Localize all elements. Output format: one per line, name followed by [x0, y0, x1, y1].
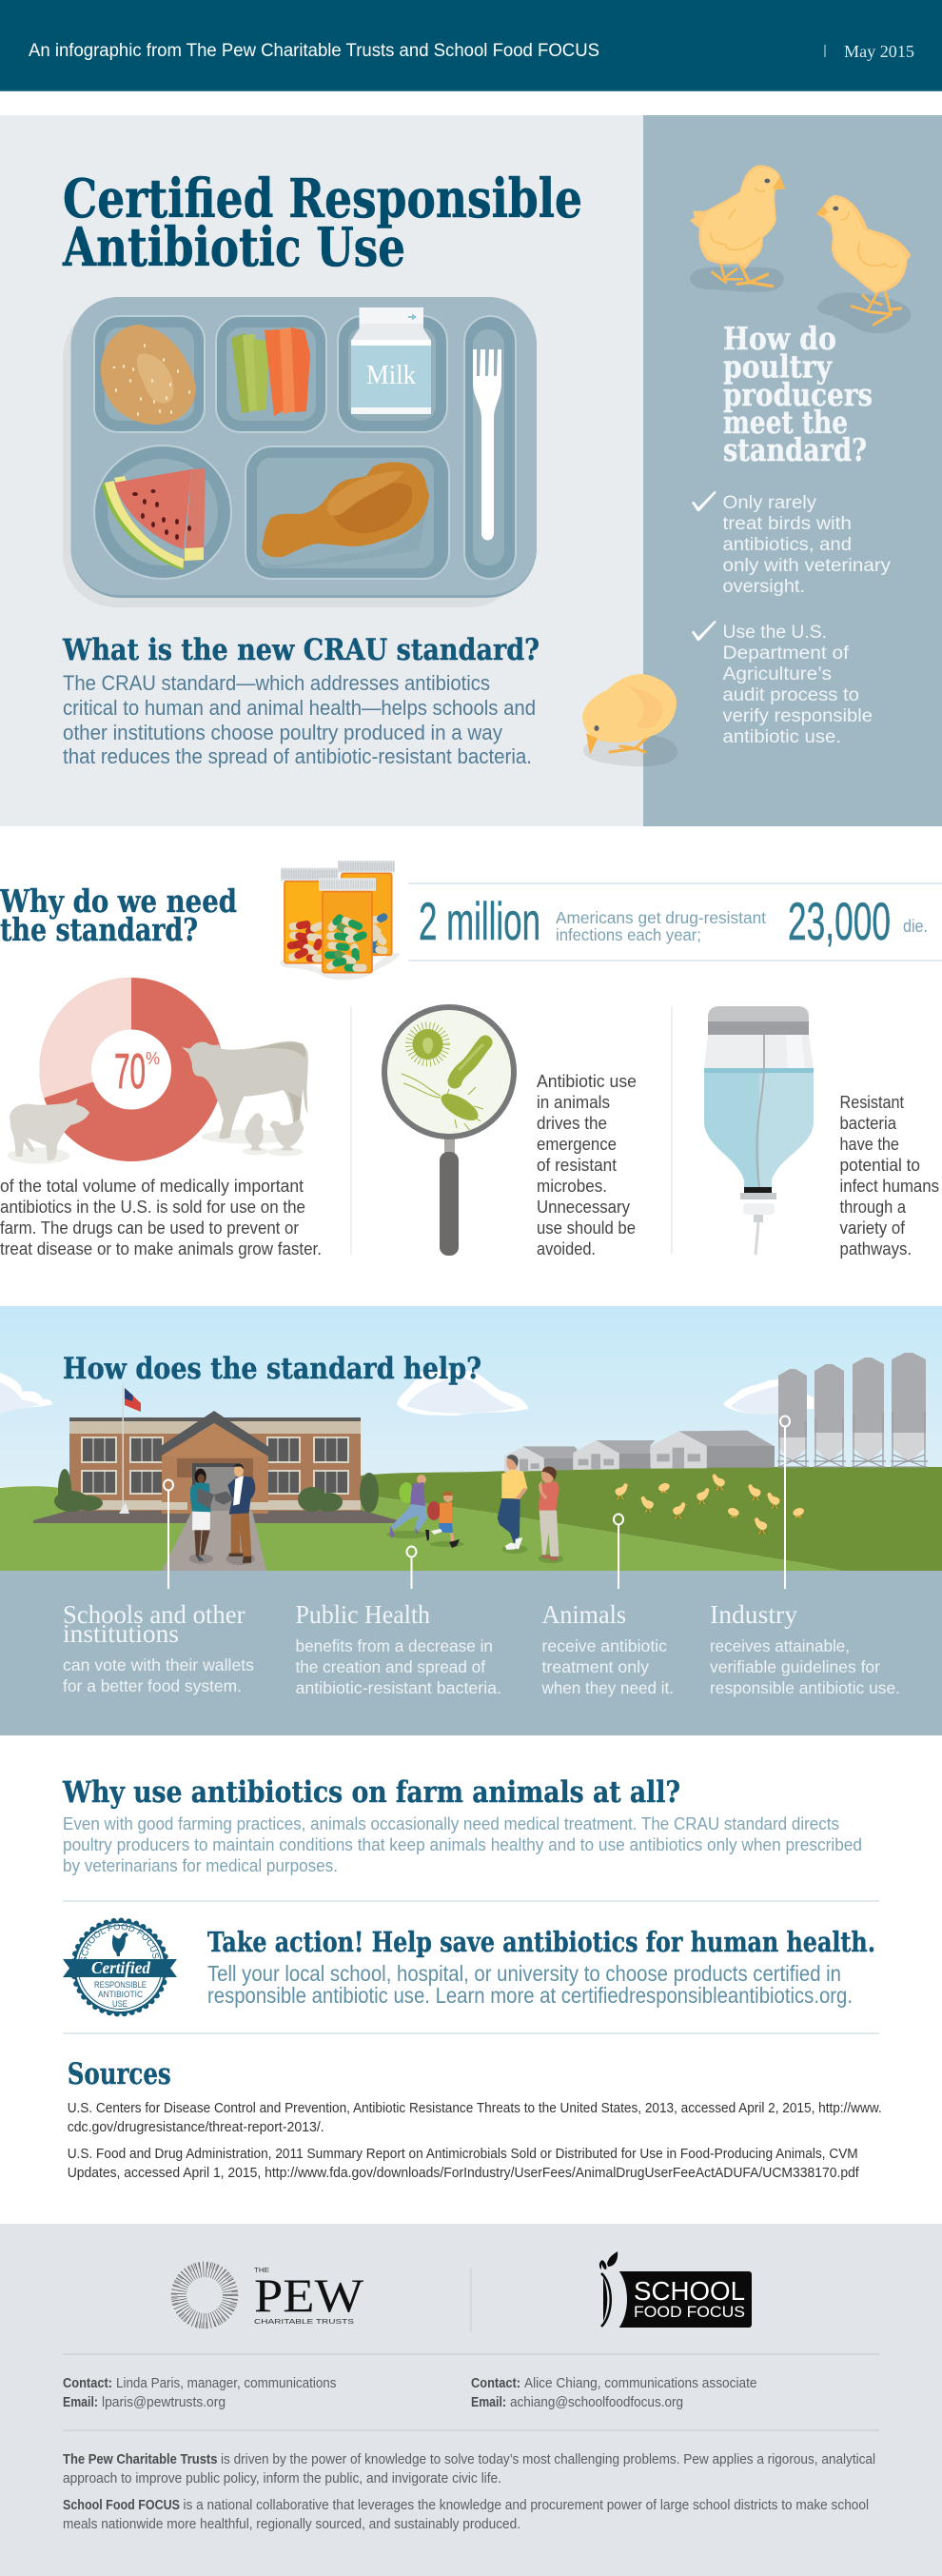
text: call to action: Tell your local school, hospital, or university to choose products certified in [207, 1961, 841, 1986]
food: celery and carrots [231, 327, 310, 416]
illustration: lunch tray [63, 297, 537, 607]
text: about Pew: is driven by the power of knowledge to solve today’s most challenging problems. Pew applies a rigorous, analytical [221, 2452, 875, 2467]
icon: IV bottle [704, 1006, 814, 1255]
food: bun [101, 325, 196, 425]
panel: footer [0, 2224, 942, 2576]
school building [33, 1411, 398, 1523]
title [62, 168, 582, 279]
column: animals: Animals [542, 1600, 626, 1629]
text: antibiotic use in animals: emergence [537, 1134, 617, 1154]
heading: why do we need the standard: the standard? [0, 911, 198, 948]
text: 70 percent explanation: antibiotics in the U.S. is sold for use on the [0, 1197, 305, 1217]
text: Pew contact: Linda Paris, manager, communications [116, 2376, 337, 2391]
column: public health: benefits from a decrease in [295, 1636, 493, 1655]
badge: certified seal [63, 1917, 177, 2016]
icon: check mark two [692, 621, 716, 641]
text: CRAU standard description: that reduces the spread of antibiotic-resistant bacteria. [63, 744, 532, 768]
text: about School Food FOCUS: School Food FOCUS [63, 2498, 180, 2513]
text: about School Food FOCUS [63, 2498, 869, 2532]
badge: certified seal: SCHOOL FOOD FOCUS [80, 1923, 159, 1959]
heading: how do poultry producers meet the standard: How do [723, 320, 836, 357]
text: antibiotic use in animals: Unnecessary [537, 1197, 631, 1217]
text: explanation: by veterinarians for medical purposes. [63, 1856, 338, 1875]
ground: hills [0, 1467, 942, 1571]
column: industry: verifiable guidelines for [710, 1657, 880, 1676]
text: explanation [63, 1814, 862, 1875]
text: resistant bacteria: pathways. [839, 1238, 912, 1258]
heading: why use antibiotics: Why use antibiotics on farm animals at all? [62, 1775, 680, 1810]
illustration: pecking chick [582, 674, 677, 766]
heading: how do poultry producers meet the standard: poultry [723, 348, 833, 385]
column: schools and other institutions: Schools and other [63, 1600, 245, 1629]
text: call to action [207, 1961, 853, 2008]
pin: industry [780, 1417, 790, 1589]
heading: how does the standard help: How does the standard help? [63, 1352, 481, 1386]
heading: how do poultry producers meet the standard: standard? [723, 431, 867, 468]
heading: how do poultry producers meet the standard [723, 320, 873, 468]
column: public health: antibiotic-resistant bacteria. [295, 1678, 501, 1697]
text: use the USDA audit process: Department of [723, 644, 850, 664]
pin: public health [407, 1546, 417, 1589]
logo: Pew: PEW [254, 2269, 364, 2322]
chart: 70 percent donut: % [146, 1049, 160, 1068]
text: source citations: Updates, accessed April 1, 2015, http://www.fda.gov/downloads/ForIndustry/UserFees/AnimalDrugUserFeeActADUFA/UCM338170.pdf [68, 2166, 860, 2181]
heading: how do poultry producers meet the standard: producers [723, 376, 873, 413]
chart: 70 percent donut [39, 978, 224, 1161]
people: adults at school [189, 1464, 255, 1565]
compartments [94, 316, 516, 579]
text: source citations: cdc.gov/drugresistance/threat-report-2013/. [68, 2120, 324, 2135]
text: CRAU standard description [63, 671, 536, 768]
illustration: farm animals [8, 1041, 308, 1164]
front bottle [323, 892, 372, 973]
panel: why use antibiotics on farm animals [62, 1775, 882, 2181]
text: School Food Focus contact: Alice Chiang, communications associate [524, 2376, 757, 2391]
text: antibiotic use in animals [537, 1071, 637, 1258]
barns [504, 1431, 775, 1472]
column: schools and other institutions: can vote with their wallets [63, 1655, 254, 1674]
text: 70 percent explanation: of the total volume of medically important [0, 1176, 304, 1196]
people: children running [386, 1475, 464, 1548]
food: milk carton [351, 307, 431, 414]
chicks in field [615, 1475, 805, 1534]
text: Pew contact [63, 2376, 337, 2410]
icon: check mark one [692, 491, 716, 511]
logo: School Food Focus: FOOD FOCUS [634, 2303, 745, 2321]
text: about School Food FOCUS: is a national collaborative that leverages the knowledge and procurement power of large school districts to make school [183, 2498, 869, 2513]
text: antibiotic use in animals: microbes. [537, 1176, 607, 1196]
column: schools and other institutions: for a better food system. [63, 1676, 242, 1695]
text: Americans get drug-resistant infections: Americans get drug-resistant [556, 908, 766, 927]
text: School Food Focus contact [471, 2376, 757, 2410]
text: CRAU standard description: critical to human and animal health—helps schools and [63, 696, 536, 720]
text: resistant bacteria: Resistant [839, 1092, 904, 1112]
text: 70 percent explanation: treat disease or to make animals grow faster. [0, 1238, 322, 1258]
text: 70 percent explanation [0, 1176, 322, 1258]
title: Certified Responsible [63, 168, 582, 230]
text: Americans get drug-resistant infections [556, 908, 766, 944]
column: industry: responsible antibiotic use. [710, 1678, 900, 1697]
header band: May 2015 [844, 42, 914, 61]
chart: 70 percent donut: 70 [114, 1044, 146, 1100]
text: antibiotic use in animals: drives the [537, 1113, 607, 1133]
text: antibiotic use in animals: in animals [537, 1092, 610, 1112]
logo: Pew: THE [254, 2268, 269, 2274]
text: antibiotic use in animals: use should be [537, 1218, 636, 1238]
back bottle [342, 873, 392, 955]
stat: 2 million: 2 million [419, 891, 540, 951]
column: schools and other institutions: institutions [63, 1619, 179, 1648]
text: resistant bacteria: bacteria [839, 1113, 897, 1133]
walkway [162, 1511, 266, 1571]
column: animals: when they need it. [541, 1678, 674, 1697]
badge: certified seal: USE [112, 1999, 128, 2010]
text: about Pew: approach to improve public policy, inform the public, and invigorate civic life. [63, 2471, 501, 2487]
panel: how does the standard help scene [0, 1306, 942, 1571]
heading: why do we need the standard: Why do we need [0, 882, 237, 920]
text: antibiotic use in animals: avoided. [537, 1238, 596, 1258]
logo: Pew: CHARITABLE TRUSTS [254, 2317, 354, 2326]
column: industry: Industry [710, 1600, 798, 1629]
pin: animals [614, 1514, 623, 1589]
pin: schools [164, 1479, 173, 1589]
logo: School Food Focus: SCHOOL [634, 2276, 745, 2306]
header band: An infographic from The Pew Charitable Trusts and School Food FOCUS [29, 41, 599, 61]
text: use the USDA audit process: verify responsible [723, 706, 873, 726]
text: resistant bacteria: have the [839, 1134, 899, 1154]
column: animals: receive antibiotic [542, 1636, 667, 1655]
column: public health [295, 1600, 501, 1697]
left bottle [285, 882, 338, 963]
text: Pew contact: Contact: [63, 2376, 112, 2391]
column: schools and other institutions [63, 1600, 254, 1695]
panel: why do we need the standard [0, 861, 942, 1258]
text: use the USDA audit process: Use the U.S. [723, 623, 827, 643]
column: public health: the creation and spread of [295, 1657, 485, 1676]
text: School Food Focus contact: Contact: [471, 2376, 520, 2391]
text: Americans get drug-resistant infections: infections each year; [556, 925, 701, 944]
text: only rarely treat birds: only with veterinary [723, 556, 892, 576]
text: die: die. [903, 917, 928, 936]
badge: certified seal: RESPONSIBLE [94, 1980, 147, 1991]
text: about School Food FOCUS: meals nationwide more healthful, regionally sourced, and sustainably produced. [63, 2517, 520, 2532]
fork [473, 349, 501, 541]
cow [182, 1041, 308, 1139]
silos [777, 1353, 928, 1467]
text: Pew contact: lparis@pewtrusts.org [102, 2395, 226, 2410]
text: source citations [68, 2101, 882, 2181]
windows [82, 1437, 348, 1494]
people: adults in field [498, 1455, 563, 1563]
column: public health: Public Health [295, 1600, 430, 1629]
text: about Pew [63, 2452, 875, 2487]
text: explanation: poultry producers to maintain conditions that keep animals healthy and to use antibiotics only when prescribed [63, 1835, 862, 1854]
panel: beneficiaries [0, 1352, 942, 1735]
header band [0, 0, 942, 91]
text: School Food Focus contact: Email: [471, 2395, 506, 2410]
food: watermelon [102, 468, 206, 570]
logo: School Food Focus [599, 2251, 752, 2328]
text: School Food Focus contact: achiang@schoolfoodfocus.org [510, 2395, 683, 2410]
food: milk carton: Milk [366, 361, 416, 390]
subheading: what is the new CRAU standard: What is the new CRAU standard? [62, 633, 540, 667]
text: only rarely treat birds: Only rarely [723, 493, 817, 513]
heading: why do we need the standard [0, 882, 237, 948]
text: CRAU standard description: other institutions choose poultry produced in a way [63, 721, 502, 744]
heading: how do poultry producers meet the standard: meet the [723, 404, 848, 441]
text: antibiotic use in animals: of resistant [537, 1155, 617, 1175]
text: use the USDA audit process [723, 623, 873, 747]
illustration: pill bottles [280, 861, 400, 980]
text: only rarely treat birds: oversight. [723, 577, 805, 597]
clouds [0, 1369, 814, 1416]
text: use the USDA audit process: antibiotic use. [723, 727, 841, 747]
title: Antibiotic Use [62, 216, 405, 279]
pig [10, 1099, 89, 1160]
badge: certified seal: Certified [91, 1958, 151, 1977]
text: about Pew: The Pew Charitable Trusts [63, 2452, 217, 2467]
text: Pew contact: Email: [63, 2395, 98, 2410]
text: 70 percent explanation: farm. The drugs can be used to prevent or [0, 1218, 299, 1238]
panel: intro left [0, 115, 643, 826]
logo: Pew [174, 2265, 364, 2326]
text: only rarely treat birds [723, 493, 892, 597]
text: use the USDA audit process: audit process to [723, 685, 859, 705]
text: CRAU standard description: The CRAU standard—which addresses antibiotics [63, 671, 490, 695]
text: explanation: Even with good farming practices, animals occasionally need medical treatment. The CRAU standard directs [63, 1814, 839, 1833]
hen two [269, 1119, 304, 1150]
heading: sources: Sources [68, 2057, 171, 2091]
text: only rarely treat birds: antibiotics, and [723, 535, 852, 555]
column: animals [541, 1600, 674, 1697]
illustration: two chicks [690, 165, 911, 333]
text: use the USDA audit process: Agriculture’s [723, 664, 832, 684]
hen one [245, 1113, 264, 1150]
text: only rarely treat birds: treat birds with [723, 514, 852, 534]
text: resistant bacteria: through a [839, 1197, 907, 1217]
column: industry: receives attainable, [710, 1636, 850, 1655]
text: resistant bacteria: potential to [839, 1155, 920, 1175]
icon: magnifying glass with microbes [384, 1007, 514, 1256]
badge: certified seal: ANTIBIOTIC [98, 1990, 143, 2000]
panel: poultry producers [643, 115, 942, 826]
column: animals: treatment only [542, 1657, 649, 1676]
text: resistant bacteria: variety of [839, 1218, 906, 1238]
bushes [54, 1469, 379, 1513]
text: resistant bacteria [839, 1092, 939, 1258]
text: source citations: U.S. Centers for Disease Control and Prevention, Antibiotic Resistance Threats to the United States, 2013, accessed April 2, 2015, http://www. [68, 2101, 882, 2116]
flagpole and flag [119, 1383, 141, 1514]
text: source citations: U.S. Food and Drug Administration, 2011 Summary Report on Antimicrobials Sold or Distributed for Use in Food-Producing Animals, CVM [68, 2147, 858, 2162]
column: industry [710, 1600, 900, 1697]
text: antibiotic use in animals: Antibiotic use [537, 1071, 637, 1091]
text: call to action: responsible antibiotic use. Learn more at certifiedresponsibleantibiotics.org. [207, 1983, 853, 2008]
food: chicken leg [262, 462, 430, 569]
